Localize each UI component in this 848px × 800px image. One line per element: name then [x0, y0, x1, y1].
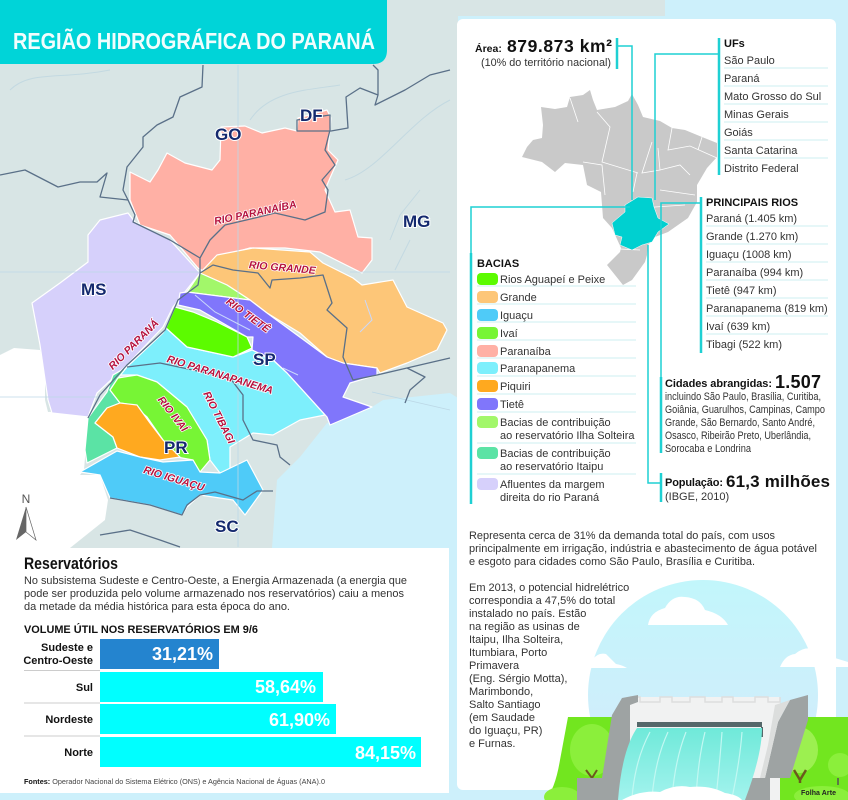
land base — [0, 0, 665, 548]
legend: basins: Grande — [500, 292, 537, 304]
text block: hydroelectric potential: (em Saudade — [469, 712, 535, 724]
state labels: MG — [403, 212, 430, 231]
legend: basins: Afluentes da margem — [500, 479, 605, 491]
list: UFs: São Paulo — [724, 55, 775, 67]
text block: hydroelectric potential: (Eng. Sérgio Motta), — [469, 673, 567, 685]
river labels: RIO GRANDE — [248, 259, 317, 277]
sky — [588, 580, 818, 800]
trees — [570, 724, 614, 776]
legend: basins: Bacias de contribuição — [500, 417, 611, 429]
list: UFs: Paraná — [724, 73, 760, 85]
bar chart: Norte — [64, 747, 93, 759]
bar chart: Sudeste e — [41, 642, 93, 654]
list: main rivers: Grande (1.270 km) — [706, 231, 798, 243]
list: main rivers: Tietê (947 km) — [706, 285, 777, 297]
basin: Aguapeí and Peixe — [166, 307, 252, 357]
basin: Grande — [200, 248, 447, 373]
population callout: 61,3 milhões — [726, 472, 830, 491]
cities callout: 1.507 — [775, 372, 821, 392]
text block: hydroelectric potential: Em 2013, o potencial hidrelétrico — [469, 582, 629, 594]
grid and faint rivers — [0, 65, 450, 547]
list: UFs: Santa Catarina — [724, 145, 798, 157]
text block: hydroelectric potential: Primavera — [469, 660, 520, 672]
text block: reservoirs intro: da metade da média histórica para esta época do ano. — [24, 601, 290, 613]
panel: reservoirs — [0, 548, 449, 793]
text block: demand — [469, 530, 817, 568]
text block: reservoirs intro: No subsistema Sudeste e Centro-Oeste, a Energia Armazenada (a energia que — [24, 575, 407, 587]
bar chart — [23, 639, 421, 767]
green banks — [545, 717, 612, 800]
area callout: (10% do território nacional) — [481, 57, 611, 69]
text block: hydroelectric potential — [469, 582, 629, 750]
cities callout: Grande, São Bernardo, Santo André, — [665, 417, 815, 429]
population callout: População: — [665, 477, 723, 489]
illustration: dam — [544, 580, 848, 800]
state labels: SP — [253, 350, 276, 369]
text block: reservoirs intro: pode ser produzida pelo volume armazenado nos reservatórios) caiu a menos — [24, 588, 404, 600]
basin: Iguaçu — [80, 451, 263, 515]
credit: Folha Arte — [801, 790, 836, 797]
text block: demand: e esgoto para cidades como São Paulo, Brasília e Curitiba. — [469, 556, 755, 568]
state labels — [81, 106, 430, 536]
legend: basins: BACIAS — [477, 258, 519, 270]
cities callout: Sorocaba e Londrina — [665, 443, 752, 455]
text block: hydroelectric potential: Itaipu, Ilha Solteira, — [469, 634, 563, 646]
list: UFs: Minas Gerais — [724, 109, 789, 121]
state labels: SC — [215, 517, 239, 536]
text block: demand: principalmente em irrigação, indústria e abastecimento de água potável — [469, 543, 817, 555]
area callout — [475, 36, 617, 69]
dam abutments — [577, 695, 638, 800]
state labels: GO — [215, 125, 241, 144]
text block: hydroelectric potential: correspondia a 47,5% do total — [469, 595, 615, 607]
legend: basins: Paranapanema — [500, 363, 576, 375]
title banner: REGIÃO HIDROGRÁFICA DO PARANÁ — [13, 27, 375, 54]
icon: north arrow: N — [22, 492, 30, 506]
population callout: (IBGE, 2010) — [665, 491, 729, 503]
area callout: 879.873 km² — [507, 36, 612, 56]
neighbouring countries in white — [0, 348, 108, 548]
legend: basins: direita do rio Paraná — [500, 492, 600, 504]
list: main rivers: Paranapanema (819 km) — [706, 303, 828, 315]
gate strip — [637, 722, 762, 727]
waterfall — [618, 728, 762, 800]
river labels: RIO TIETÊ — [223, 295, 273, 336]
legend: basins: Piquiri — [500, 381, 531, 393]
highlighted region — [612, 197, 669, 250]
text block: hydroelectric potential: Itumbiara, Porto — [469, 647, 547, 659]
state borders and main rivers — [0, 65, 203, 200]
basin: Itaipu contribution — [85, 367, 127, 463]
list: UFs: Mato Grosso do Sul — [724, 91, 821, 103]
legend: basins: ao reservatório Itaipu — [500, 461, 603, 473]
list: main rivers: Ivaí (639 km) — [706, 321, 770, 333]
legend: basins: Iguaçu — [500, 310, 533, 322]
list: main rivers — [701, 197, 828, 353]
bar chart: Nordeste — [45, 714, 93, 726]
bar chart: 84,15% — [355, 743, 416, 763]
legend: basins — [471, 253, 636, 504]
text block: hydroelectric potential: e Furnas. — [469, 738, 515, 750]
river labels: RIO PARANÁ — [106, 317, 161, 372]
list: main rivers: Tibagi (522 km) — [706, 339, 782, 351]
legend: basins: ao reservatório Ilha Solteira — [500, 430, 635, 442]
river labels: RIO TIBAGI — [200, 389, 237, 447]
basin: right-bank tributaries of the Paraná — [32, 213, 200, 417]
legend: basins: Tietê — [500, 399, 524, 411]
basin: Piquiri — [95, 403, 180, 460]
cities callout: incluindo São Paulo, Brasília, Curitiba, — [665, 391, 821, 403]
sources: Fontes: Operador Nacional do Sistema Elétrico (ONS) e Agência Nacional de Águas (ANA).0 — [24, 777, 325, 786]
text block: hydroelectric potential: instalado no país. Estão — [469, 608, 586, 620]
text block: demand: Representa cerca de 31% da demanda total do país, com usos — [469, 530, 775, 542]
bar chart: 61,90% — [269, 710, 330, 730]
clouds — [648, 597, 728, 625]
river labels: RIO IVAÍ — [155, 394, 192, 436]
chart title: VOLUME ÚTIL NOS RESERVATÓRIOS EM 9/6 — [24, 623, 258, 636]
legend: basins: Paranaíba — [500, 346, 552, 358]
list: main rivers: Paraná (1.405 km) — [706, 213, 797, 225]
legend: basins: Bacias de contribuição — [500, 448, 611, 460]
basin: Ivaí — [110, 375, 210, 472]
list: main rivers: Paranaíba (994 km) — [706, 267, 803, 279]
state labels: PR — [164, 438, 188, 457]
text block: hydroelectric potential: na região as usinas de — [469, 621, 580, 633]
icon: north arrow — [16, 492, 36, 540]
state labels: MS — [81, 280, 106, 299]
legend: basins: Ivaí — [500, 328, 518, 340]
list: UFs: Goiás — [724, 127, 753, 139]
heading: Reservatórios: Reservatórios — [24, 555, 118, 573]
list: UFs: Distrito Federal — [724, 163, 799, 175]
connector lines — [471, 46, 719, 483]
bar chart: 31,21% — [152, 644, 213, 664]
bar chart: Centro-Oeste — [23, 655, 93, 667]
foam — [622, 786, 742, 800]
bar chart: Sul — [76, 682, 93, 694]
text block: hydroelectric potential: Marimbondo, — [469, 686, 533, 698]
basin: Tietê — [178, 292, 377, 425]
state labels: DF — [300, 106, 323, 125]
dam wall — [630, 697, 780, 800]
text block: reservoirs intro — [24, 575, 407, 613]
cities callout — [661, 372, 825, 455]
panel: facts — [457, 19, 836, 790]
basin: Paranaíba — [130, 110, 372, 273]
area callout: Área: — [475, 42, 502, 55]
river labels — [106, 198, 317, 494]
basin: Ilha Solteira contribution — [187, 273, 250, 300]
list: UFs — [719, 38, 828, 175]
list: main rivers: PRINCIPAIS RIOS — [706, 197, 798, 209]
bar chart: 58,64% — [255, 677, 316, 697]
basin: Paranapanema — [113, 328, 325, 473]
legend: basins: Rios Aguapeí e Peixe — [500, 274, 605, 286]
cities callout: Cidades abrangidas: — [665, 378, 772, 390]
title banner — [0, 0, 387, 64]
map: hydrographic region — [0, 0, 665, 548]
text block: hydroelectric potential: Salto Santiago — [469, 699, 541, 711]
population callout — [661, 472, 830, 503]
river labels: RIO PARANAPANEMA — [165, 353, 274, 397]
river labels: RIO PARANAÍBA — [213, 198, 298, 228]
cities callout: Osasco, Ribeirão Preto, Uberlândia, — [665, 430, 811, 442]
list: main rivers: Iguaçu (1008 km) — [706, 249, 792, 261]
list: UFs: UFs — [724, 38, 745, 50]
text block: hydroelectric potential: do Iguaçu, PR) — [469, 725, 542, 737]
map of Brazil — [522, 90, 717, 285]
river labels: RIO IGUAÇU — [142, 464, 206, 494]
